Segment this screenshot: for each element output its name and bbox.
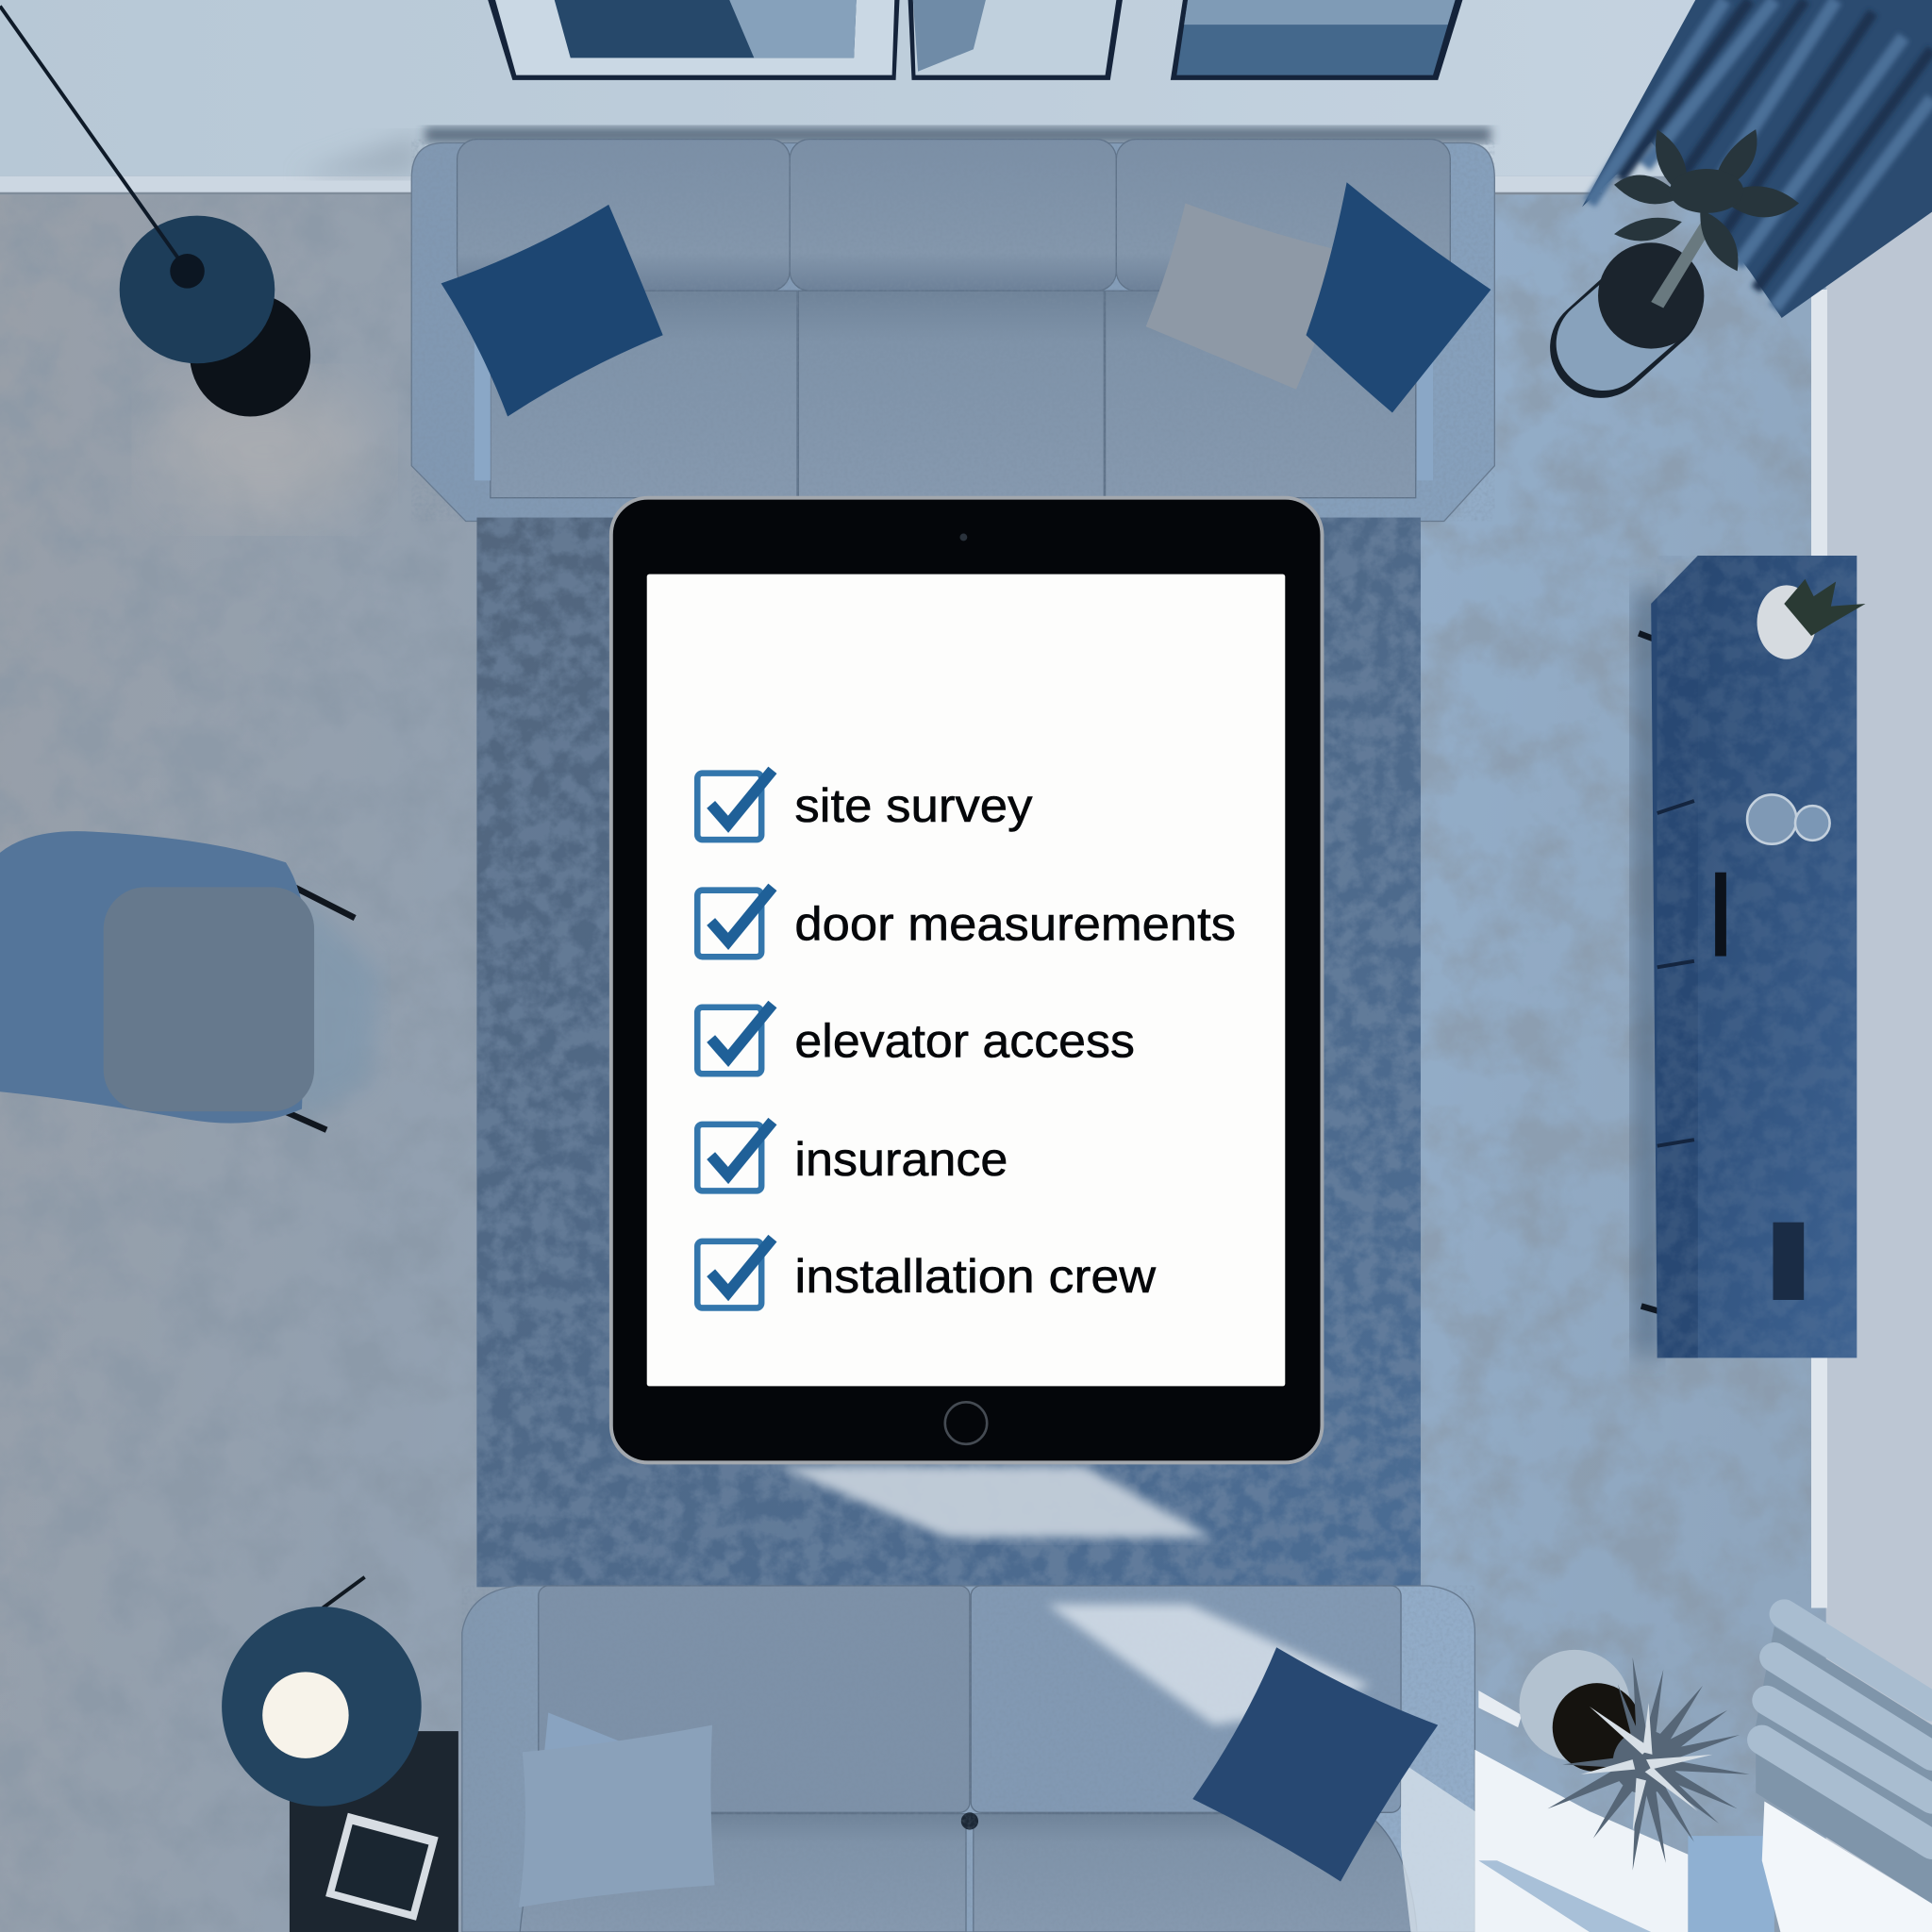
potted plant, top right xyxy=(1598,129,1799,349)
item: insurance xyxy=(697,1122,1008,1191)
seat cushion left xyxy=(520,1814,966,1932)
soil xyxy=(1598,242,1704,349)
chair cushion xyxy=(104,887,314,1111)
curtain, bottom right xyxy=(1756,1614,1932,1932)
top sofa xyxy=(411,140,1494,521)
lamp shade xyxy=(222,1607,422,1807)
navy pillow xyxy=(1192,1647,1438,1881)
back cushion center xyxy=(790,140,1116,291)
armchair xyxy=(0,831,382,1130)
pot outline xyxy=(1601,302,1651,347)
picture 1 xyxy=(488,0,899,80)
curtain, top right xyxy=(1582,0,1932,318)
lamp shade xyxy=(120,216,275,363)
item: door measurements xyxy=(697,887,1236,957)
tablet body xyxy=(611,498,1322,1462)
back cushion left xyxy=(458,140,790,291)
seat cushion right xyxy=(974,1814,1417,1932)
item: elevator access: elevator access xyxy=(794,1015,1135,1068)
console body xyxy=(1651,556,1857,1357)
lamp base xyxy=(190,293,310,416)
side table and lamp, bottom left xyxy=(222,1577,458,1932)
legs xyxy=(1639,633,1658,1311)
rug xyxy=(476,518,1421,1587)
right wall xyxy=(1811,185,1932,1932)
item: site survey: site survey xyxy=(794,779,1033,832)
pale pillow xyxy=(519,1725,715,1907)
handle xyxy=(1715,873,1726,957)
sunlight patch on rug xyxy=(776,1466,1214,1538)
TV console xyxy=(1633,556,1865,1357)
picture 2 xyxy=(908,0,1123,80)
back cushion right xyxy=(971,1586,1401,1812)
sunlight on sofa arm xyxy=(1401,1762,1474,1932)
potted plant, bottom right xyxy=(1519,1650,1750,1871)
back cushion right xyxy=(1116,140,1450,291)
navy pillow right xyxy=(1306,182,1491,413)
back cushion left xyxy=(539,1586,970,1812)
screen xyxy=(647,575,1285,1386)
item: door measurements: door measurements xyxy=(794,898,1236,951)
sofa frame xyxy=(411,143,1494,521)
tablet xyxy=(611,498,1322,1462)
soil xyxy=(1553,1683,1641,1772)
chair shadow xyxy=(295,887,382,1122)
checklist xyxy=(697,770,1236,1307)
gray pillow xyxy=(1146,204,1349,390)
pot xyxy=(1519,1650,1630,1760)
home button xyxy=(945,1402,987,1444)
floor lamp, top left xyxy=(0,7,310,416)
pale pillow back xyxy=(542,1713,641,1811)
item: insurance: insurance xyxy=(794,1133,1008,1186)
chair legs xyxy=(274,885,355,1130)
item: installation crew: installation crew xyxy=(794,1250,1156,1303)
pot xyxy=(1603,302,1651,343)
window light xyxy=(1762,1802,1932,1932)
sunlight on floor, bottom right xyxy=(1474,1690,1774,1932)
item: installation crew xyxy=(697,1239,1156,1307)
leaves xyxy=(1614,129,1799,308)
glass decanter xyxy=(1747,794,1830,844)
item: site survey xyxy=(697,770,1033,840)
handle lower xyxy=(1774,1223,1804,1300)
framed pictures xyxy=(488,0,1462,80)
seat cushion left xyxy=(491,291,797,498)
lamp bulb xyxy=(262,1672,349,1758)
navy pillow left xyxy=(441,205,663,416)
lamp cord xyxy=(323,1577,365,1607)
sunlight on sofa xyxy=(1047,1605,1370,1725)
seat cushion center xyxy=(798,291,1104,498)
item: elevator access xyxy=(697,1004,1135,1074)
seat cushion right xyxy=(1106,291,1416,498)
small plant xyxy=(1757,579,1865,659)
side table xyxy=(290,1731,458,1932)
chair shell xyxy=(0,831,308,1124)
bottom sofa xyxy=(462,1586,1474,1932)
back wall xyxy=(0,0,1932,194)
camera xyxy=(959,534,967,541)
spiky leaves xyxy=(1547,1657,1750,1871)
picture 3 xyxy=(1171,0,1462,80)
lamp arm xyxy=(0,7,188,271)
sofa frame xyxy=(462,1586,1474,1932)
books xyxy=(325,1813,439,1921)
